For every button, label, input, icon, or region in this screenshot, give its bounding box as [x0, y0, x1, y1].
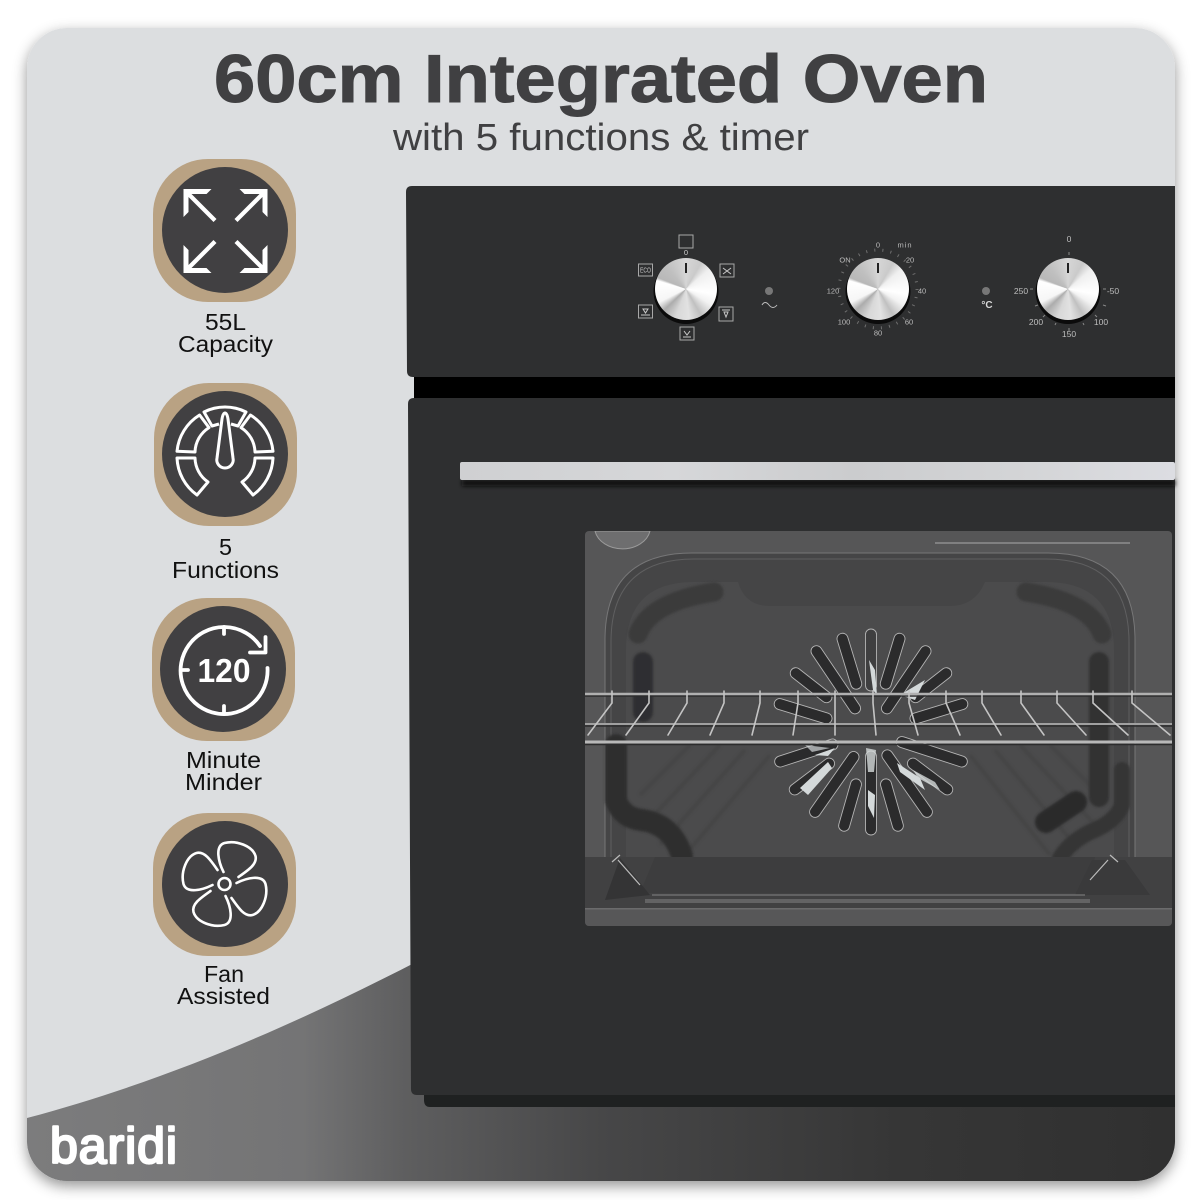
oven bottom lip	[424, 1090, 1175, 1107]
label: capacity: 55L	[205, 309, 246, 335]
timer dial markings: 80	[874, 328, 882, 338]
feature: minute minder	[152, 598, 295, 795]
label: functions	[172, 534, 279, 583]
oven light	[595, 531, 650, 549]
temperature dial markings: 200	[1029, 317, 1043, 327]
label: minute minder: Minder	[185, 769, 262, 795]
timer dial markings: 20	[906, 256, 914, 264]
curved floor band	[27, 960, 1175, 1181]
control panel	[406, 186, 1175, 377]
timer dial markings: 120	[827, 286, 839, 296]
label: fan assisted	[177, 961, 270, 1009]
temperature dial markings	[1014, 234, 1119, 339]
badge: minute minder	[152, 598, 295, 741]
timer dial markings: 60	[905, 318, 913, 326]
wire shelf	[585, 691, 1172, 744]
temperature dial markings: 150	[1062, 329, 1076, 339]
oven window	[585, 531, 1172, 926]
function dial markings	[638, 235, 734, 340]
oven gap strip	[414, 370, 1175, 404]
power indicator	[762, 287, 777, 308]
timer dial markings: 40	[918, 286, 926, 296]
label: functions: Functions	[172, 557, 279, 583]
label: fan assisted: Assisted	[177, 983, 270, 1009]
icon: 120 minute timer	[181, 627, 268, 714]
knob bases	[654, 259, 1100, 324]
badge: fan assisted	[153, 813, 296, 956]
function dial markings: ECO	[640, 268, 651, 274]
label: minute minder	[185, 747, 262, 795]
knob: temperature	[1037, 258, 1099, 320]
badge: capacity	[153, 159, 296, 302]
subtitle: with 5 functions & timer	[392, 117, 809, 159]
temperature indicator: °C	[981, 300, 993, 311]
temperature dial markings: 250	[1014, 286, 1028, 296]
feature: 5 functions	[154, 383, 297, 583]
knob: function selector	[655, 258, 717, 320]
timer dial markings: 0	[876, 240, 880, 250]
label: functions: 5	[219, 534, 232, 560]
temperature dial markings: -50	[1107, 286, 1119, 296]
label: fan assisted: Fan	[204, 961, 244, 987]
temperature indicator	[981, 287, 993, 311]
door handle	[460, 462, 1175, 486]
timer dial markings: ON	[839, 256, 851, 264]
timer dial markings: 100	[838, 318, 850, 326]
oven	[406, 186, 1175, 1107]
cavity shadow stripes	[640, 745, 1100, 855]
label: capacity	[178, 309, 273, 357]
icon: 120 minute timer: 120	[198, 652, 250, 689]
cavity embossed slots	[616, 592, 1122, 858]
title: 60cm Integrated Oven	[214, 41, 988, 117]
feature: fan assisted	[153, 813, 296, 1009]
icon: fan	[183, 842, 266, 926]
badge: functions	[154, 383, 297, 526]
temperature dial markings: 0	[1067, 234, 1072, 244]
fan cover slots	[773, 629, 969, 835]
icon: expand arrows	[184, 189, 268, 273]
top rail glint	[935, 542, 1130, 544]
logo: baridi	[50, 1118, 177, 1174]
icon: function gauge	[177, 407, 273, 495]
timer dial markings: min	[897, 240, 913, 250]
knob: timer	[847, 258, 909, 320]
feature: 55L capacity	[153, 159, 296, 357]
temperature dial markings: 100	[1094, 317, 1108, 327]
timer dial markings	[827, 240, 926, 338]
function dial markings: 0	[684, 248, 688, 257]
fan slot highlights	[800, 660, 940, 818]
label: capacity: Capacity	[178, 331, 273, 357]
label: minute minder: Minute	[186, 747, 261, 773]
oven door	[408, 398, 1175, 1095]
oven cavity back wall	[605, 553, 1135, 870]
bottom tray	[585, 855, 1172, 926]
